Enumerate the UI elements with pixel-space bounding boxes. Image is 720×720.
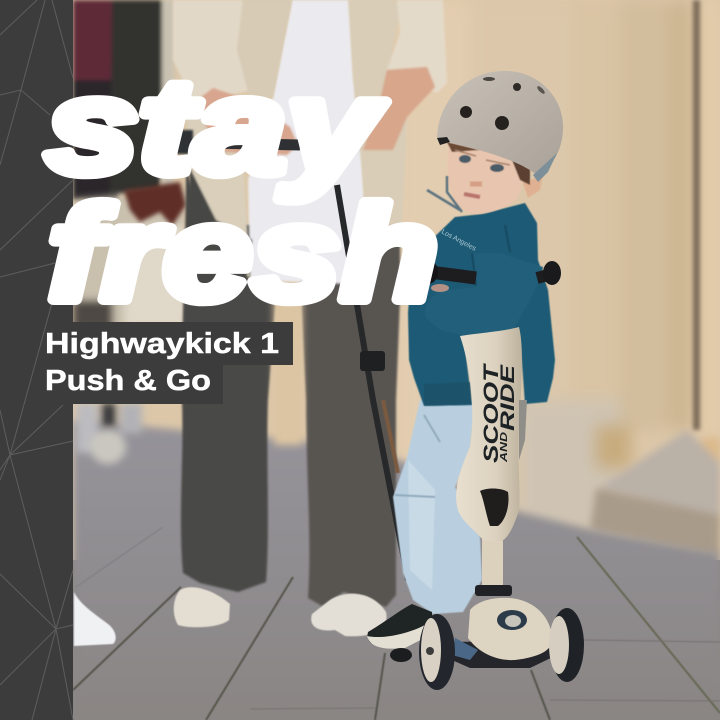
title: stay fresh: fresh	[48, 179, 438, 329]
child's sneaker	[367, 604, 432, 662]
sleeve grey side strip	[519, 400, 527, 460]
forearms and hands	[197, 67, 435, 155]
title: stay fresh: stay	[46, 51, 386, 201]
brand lettering: SCOOT	[480, 362, 503, 463]
photo: child	[367, 71, 584, 690]
trousers	[181, 165, 400, 607]
adult shoes	[174, 587, 387, 636]
pavement	[73, 420, 720, 720]
paving joints	[73, 527, 720, 720]
panel: dark side strip with geometric lines	[0, 0, 73, 720]
brand lettering	[480, 362, 519, 463]
beige wall seen between legs	[274, 285, 302, 445]
face	[427, 140, 543, 214]
subtitle: product name: Push & Go	[45, 365, 211, 397]
icon: helmet	[437, 71, 563, 182]
scooter base and deck	[452, 598, 560, 668]
jacket	[173, 0, 447, 290]
scooter grip	[418, 260, 561, 285]
subtitle background boxes	[73, 322, 293, 404]
sweatshirt print: Los Angeles	[440, 229, 477, 253]
jeans	[393, 400, 482, 614]
photo: adult with jacket and trousers	[167, 0, 447, 636]
shirt	[248, 0, 372, 285]
title: stay fresh	[46, 51, 438, 329]
scooter post and collar	[482, 538, 503, 586]
scooter wheels	[419, 608, 584, 690]
subtitle: product name	[45, 328, 279, 397]
wall columns	[395, 0, 720, 530]
scooter push bar	[167, 130, 408, 580]
subtitle: product name: Highwaykick 1	[45, 328, 279, 360]
sweatshirt	[408, 203, 555, 406]
child's hand	[431, 284, 449, 292]
photo: blurred person at left	[73, 0, 186, 464]
icon: white shoe left	[74, 592, 116, 646]
brand lettering: AND	[499, 432, 510, 463]
brand lettering: RIDE	[498, 363, 519, 431]
scooter steering column	[456, 327, 522, 541]
hand	[124, 182, 186, 226]
